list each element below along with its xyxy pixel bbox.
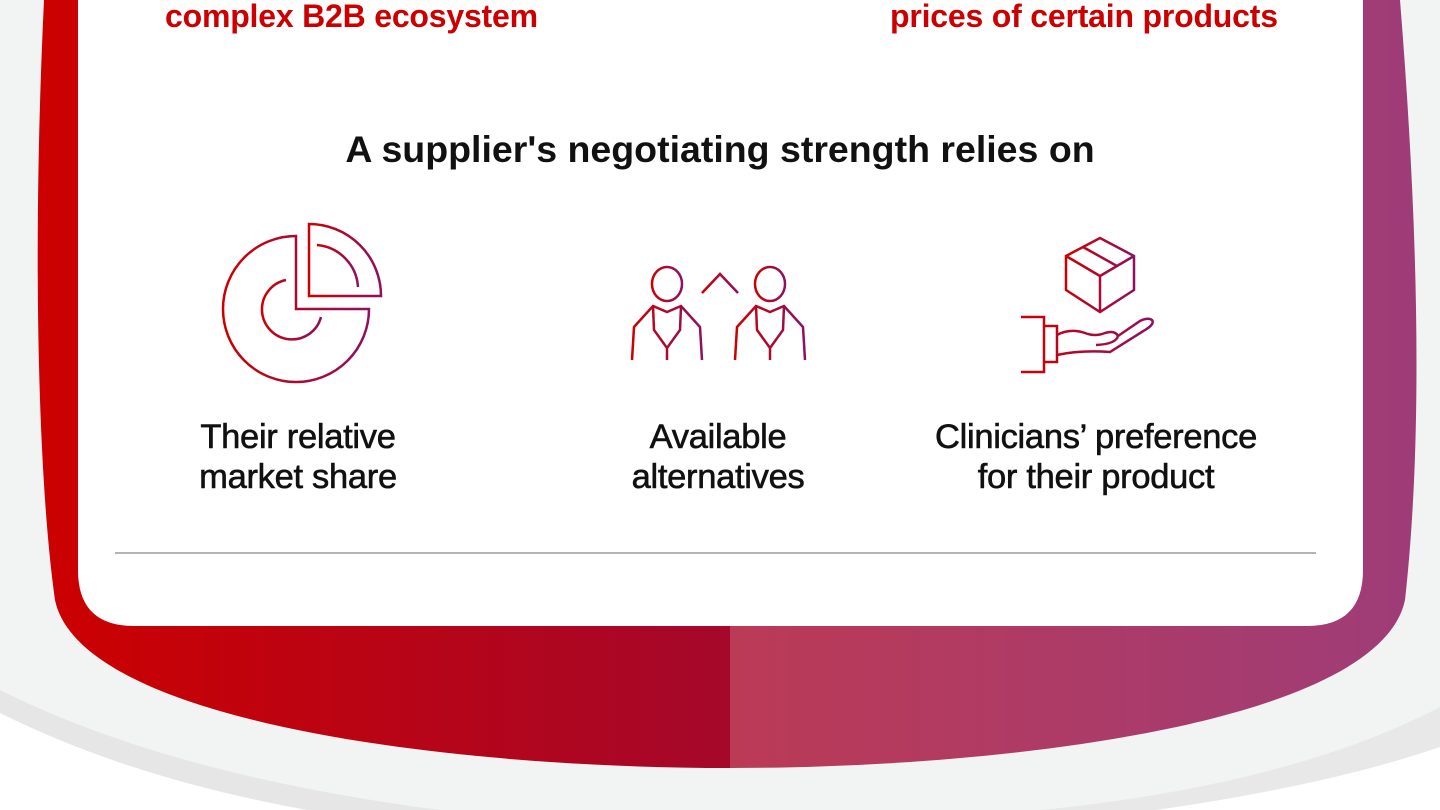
label: clinicians preference [935, 418, 1257, 496]
label: alternatives [632, 418, 804, 496]
label: alternatives: Available [650, 418, 786, 456]
heading: A supplier's negotiating strength relies on [345, 128, 1095, 170]
label: market share: Their relative [200, 418, 396, 456]
label: alternatives: alternatives [632, 458, 804, 496]
icon: people [630, 266, 806, 360]
label: clinicians preference: Clinicians’ preference [935, 418, 1257, 456]
icon: hand with box [1021, 236, 1154, 374]
icon: pie chart [222, 222, 382, 384]
label: market share [199, 418, 397, 496]
label: clinicians preference: for their product [978, 458, 1214, 496]
label: market share: market share [199, 458, 397, 496]
